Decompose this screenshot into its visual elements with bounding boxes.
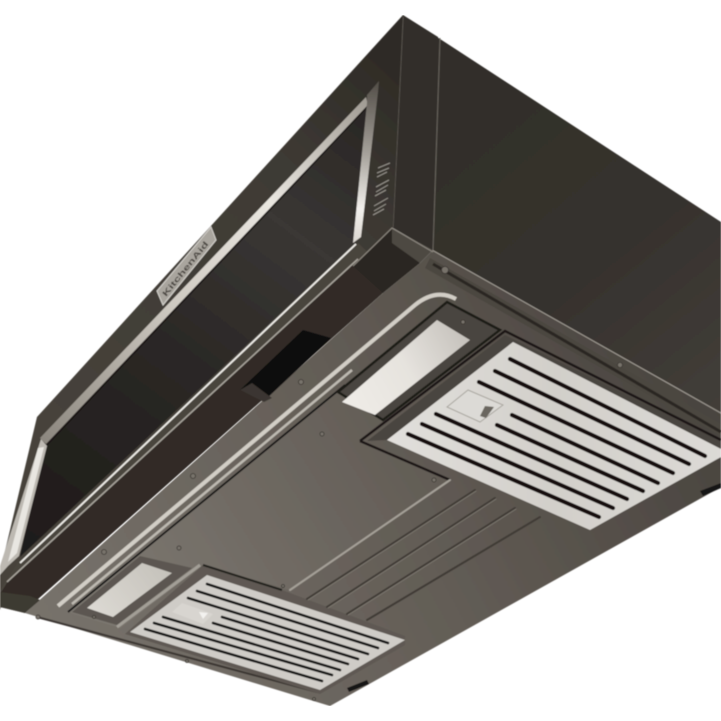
grooves in the plate: [290, 480, 540, 620]
door left chrome trim: [0, 439, 47, 575]
door window glass: [20, 104, 367, 557]
small lamp recess: [72, 556, 200, 627]
screws: [36, 266, 622, 700]
brand badge: [157, 227, 216, 305]
small grille slots: [145, 584, 388, 681]
bottom edge bevel line: [37, 617, 317, 692]
long chrome rail: [58, 295, 456, 612]
large lamp recess: [338, 302, 500, 420]
central plate: [68, 385, 450, 628]
right side panel: [432, 37, 721, 414]
door top chrome trim: [40, 97, 368, 445]
large grille slots: [408, 359, 705, 517]
small grille frame: [125, 565, 405, 694]
small filter label: [172, 603, 213, 624]
corner strip: [393, 15, 440, 251]
large lamp lens: [342, 320, 470, 415]
large grille frame: [360, 331, 721, 536]
front door panel: [0, 15, 403, 607]
vent slot: [240, 330, 331, 402]
front edge slot: [347, 483, 721, 692]
small steel grille: [130, 575, 405, 690]
small lamp lens: [87, 563, 172, 617]
brand badge: KitchenAid: [161, 240, 210, 298]
large steel grille: [387, 342, 721, 530]
control labels on the corner: [373, 163, 390, 215]
front corner block: [353, 228, 433, 293]
bottom plate: [25, 250, 721, 706]
door right chrome handle: [353, 81, 379, 243]
lower front rail: [0, 243, 372, 610]
rear edge band: [425, 258, 721, 436]
large filter label: [447, 390, 503, 422]
lower front dark panel: [0, 260, 384, 613]
